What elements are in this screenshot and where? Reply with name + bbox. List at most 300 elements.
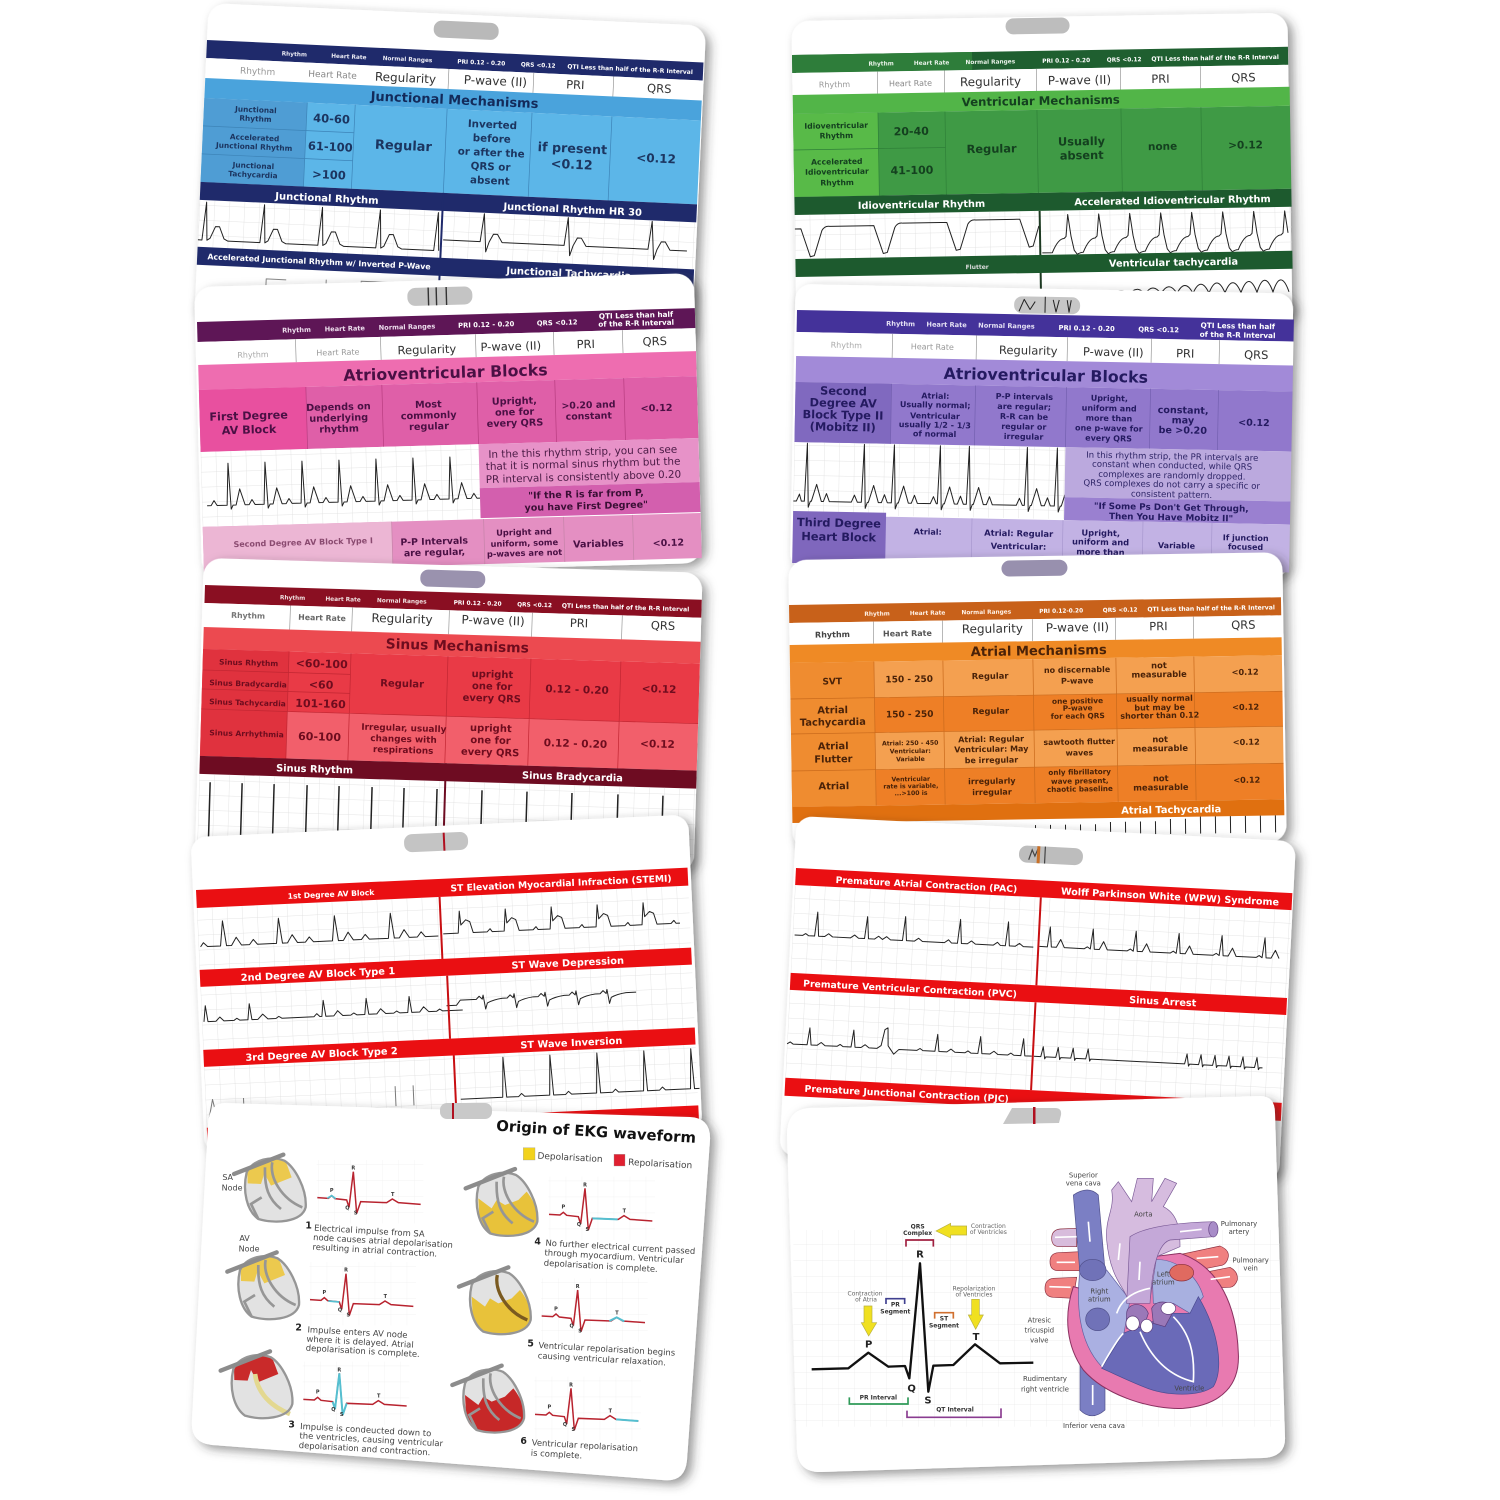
heading: Atrioventricular Blocks bbox=[198, 351, 697, 390]
chart: step 5: S bbox=[578, 1329, 582, 1335]
ecg: second row bbox=[200, 965, 695, 1050]
table: atrial: no discernable bbox=[1044, 665, 1111, 675]
strip titles row 2 bbox=[790, 973, 1287, 1015]
table: next row faded: <0.12 bbox=[653, 537, 684, 549]
chart: step 1: T bbox=[391, 1192, 395, 1198]
badge slot bbox=[1019, 845, 1083, 865]
column heads: Regularity bbox=[962, 621, 1023, 636]
header bar: QTI Less than half of the R-R Interval bbox=[1151, 54, 1279, 63]
table: atrial: 150 - 250 bbox=[885, 675, 933, 685]
table: sinus: Sinus Arrhythmia bbox=[209, 728, 284, 739]
legend bbox=[523, 1148, 692, 1171]
table: first degree: <0.12 bbox=[640, 403, 673, 415]
table: mobitz: Upright, bbox=[1091, 394, 1128, 403]
table: first degree: Most bbox=[415, 399, 442, 411]
strip titles: Idioventricular Rhythm bbox=[858, 199, 985, 212]
strip titles row 1: Wolff Parkinson White (WPW) Syndrome bbox=[1061, 886, 1280, 908]
table: first degree bbox=[199, 376, 698, 452]
column heads: Heart Rate bbox=[911, 342, 954, 352]
labels: heart anatomy: Rudimentary bbox=[1023, 1375, 1067, 1383]
ecg: first row bbox=[197, 886, 691, 970]
text: step 6: is complete. bbox=[531, 1448, 582, 1461]
strip titles: Junctional Rhythm HR 30 bbox=[502, 202, 642, 219]
callout: first degree: "If the R is far from P, bbox=[528, 488, 644, 502]
strip titles row 3: Premature Junctional Contraction (PJC) bbox=[804, 1084, 1009, 1105]
column heads: Regularity bbox=[999, 343, 1058, 358]
red strip peek bbox=[207, 1105, 699, 1146]
header bar: PRI 0.12 - 0.20 bbox=[458, 320, 515, 330]
table: sinus: every QRS bbox=[461, 747, 520, 759]
table: ventricular: >0.12 bbox=[1228, 139, 1263, 152]
table: sinus: <0.12 bbox=[640, 738, 675, 751]
chart: step 2 bbox=[309, 1262, 416, 1325]
label: PR segment: Segment bbox=[880, 1308, 911, 1315]
table: atrial: 150 - 250 bbox=[886, 710, 934, 720]
table: first degree: >0.20 and bbox=[561, 399, 616, 412]
strip titles: Atrial Tachycardia bbox=[1121, 804, 1221, 817]
text: step 5: causing ventricular relaxation. bbox=[538, 1350, 666, 1367]
table: first degree: every QRS bbox=[487, 417, 543, 430]
strip titles bbox=[200, 182, 697, 222]
table: junctional: Regular bbox=[375, 138, 433, 155]
table: next row faded: p-waves are not bbox=[487, 547, 562, 559]
column heads: P-wave (II) bbox=[480, 338, 541, 354]
heading: Atrial Mechanisms bbox=[790, 637, 1282, 663]
table: atrial: Atrial: Regular bbox=[958, 734, 1024, 744]
chart: step 5: R bbox=[576, 1284, 580, 1290]
card: atrial mechanisms bbox=[788, 552, 1287, 850]
label: PR interval bbox=[849, 1395, 908, 1404]
table: ventricular: none bbox=[1148, 141, 1177, 153]
ecg: atrial tachycardia bbox=[1035, 815, 1276, 836]
table: mobitz: be >0.20 bbox=[1158, 425, 1207, 437]
header bar: Rhythm Heart Rate Normal Ranges bbox=[282, 322, 435, 335]
chart: step 2: P bbox=[323, 1290, 327, 1296]
strip titles bbox=[792, 799, 1284, 823]
chart: step 6: S bbox=[572, 1427, 576, 1433]
heading: Junctional Mechanisms: Junctional Mechanisms bbox=[369, 89, 539, 112]
ecg: second row bbox=[785, 990, 1286, 1103]
icon: heart 4 ventricular depolarisation bbox=[466, 1169, 537, 1236]
table: first degree: Depends on bbox=[306, 401, 371, 414]
table: ventricular: 20-40 bbox=[894, 125, 929, 138]
badge slot bbox=[404, 832, 468, 853]
badge slot bbox=[420, 569, 486, 588]
labels: nodes: SA bbox=[222, 1173, 234, 1182]
text: step 6 bbox=[520, 1436, 638, 1461]
header bar bbox=[792, 47, 1288, 73]
table: junctional: Rhythm bbox=[239, 114, 272, 124]
table: atrial: but may be bbox=[1134, 703, 1186, 713]
header bar bbox=[206, 40, 703, 81]
header bar: Rhythm Heart Rate Normal Ranges bbox=[864, 610, 1012, 618]
table: atrial: Atrial bbox=[818, 741, 849, 753]
table: junctional: if present bbox=[537, 139, 608, 157]
heading: Origin of EKG waveform: Origin of EKG waveform bbox=[496, 1118, 696, 1147]
table: atrial: ...>100 is bbox=[894, 790, 928, 797]
table: sinus: Irregular, usually bbox=[361, 723, 447, 735]
heading: Sinus Mechanisms bbox=[203, 627, 701, 664]
table: first degree: Upright, bbox=[492, 396, 537, 408]
label: PR interval: PR Interval bbox=[860, 1395, 897, 1402]
table: sinus: 0.12 - 0.20 bbox=[544, 737, 607, 751]
table: sinus: Sinus Tachycardia bbox=[209, 697, 286, 708]
icon: heart anatomy bbox=[1045, 1178, 1238, 1416]
table: sinus: <60-100 bbox=[295, 657, 348, 671]
heading: Atrioventricular Blocks: Atrioventricular Blocks bbox=[943, 364, 1148, 387]
table: first degree: regular bbox=[409, 421, 449, 433]
table: mobitz: are regular; bbox=[997, 402, 1051, 412]
chart: step 1: Q bbox=[345, 1205, 349, 1211]
column heads: Heart Rate bbox=[308, 70, 357, 82]
column heads: Heart Rate bbox=[316, 347, 360, 358]
table: ventricular: 41-100 bbox=[890, 164, 934, 177]
chart: step 6: P bbox=[548, 1405, 552, 1411]
text: step 1: resulting in atrial contraction. bbox=[312, 1242, 437, 1259]
card: ventricular mechanisms bbox=[791, 13, 1294, 331]
chart: step 5: Q bbox=[570, 1324, 574, 1330]
chart: step 4: Q bbox=[577, 1222, 581, 1228]
card: atrioventricular blocks purple bbox=[790, 284, 1294, 578]
labels: heart anatomy: Ventricle bbox=[1174, 1385, 1204, 1393]
table: first degree: commonly bbox=[401, 410, 457, 422]
header bar: QTI Less than half of the R-R Interval bbox=[1147, 604, 1275, 613]
strip titles row 3: 3rd Degree AV Block Type 2 bbox=[245, 1046, 398, 1064]
table: mobitz: uniform and bbox=[1082, 403, 1137, 414]
table: atrial: P-wave bbox=[1061, 676, 1094, 686]
table: atrial: irregular bbox=[972, 788, 1012, 797]
table: atrial: rate is variable, bbox=[883, 783, 938, 791]
text: step 3: Impulse is condeucted down to bbox=[300, 1421, 432, 1438]
table: atrial: only fibrillatory bbox=[1048, 767, 1111, 777]
header bar: QTI Less than half of the R-R Interval bbox=[567, 63, 693, 76]
label: PR segment: PR bbox=[891, 1302, 900, 1309]
table: mobitz: every QRS bbox=[1085, 434, 1132, 443]
text: step 2: Impulse enters AV node bbox=[307, 1324, 408, 1340]
heading: Sinus Mechanisms: Sinus Mechanisms bbox=[386, 636, 529, 657]
chart: ecg waveform: P bbox=[865, 1339, 872, 1350]
header bar: QTI Less than half bbox=[599, 310, 674, 321]
table: atrial: Ventricular: May bbox=[954, 744, 1029, 754]
table: sinus: upright bbox=[471, 669, 514, 681]
label: QT interval: QT Interval bbox=[936, 1407, 974, 1414]
strip titles row 2: Premature Ventricular Contraction (PVC) bbox=[803, 979, 1017, 1000]
table: sinus bbox=[200, 649, 700, 771]
header bar bbox=[789, 597, 1281, 623]
table: atrial: measurable bbox=[1133, 782, 1189, 793]
table: junctional: Junctional Rhythm bbox=[215, 140, 293, 153]
badge slot bbox=[433, 20, 499, 40]
column heads: P-wave (II) bbox=[1046, 620, 1109, 635]
arrow: QRS complex: of Ventricles bbox=[970, 1229, 1007, 1236]
table: atrial: measurable bbox=[1133, 743, 1188, 754]
table: third degree faded: Atrial: bbox=[914, 527, 942, 537]
table: junctional: Tachycardia bbox=[228, 169, 278, 180]
table: next row faded: Variables bbox=[573, 538, 624, 551]
table: ventricular: Rhythm bbox=[820, 178, 854, 188]
header bar: PRI 0.12 - 0.20 bbox=[454, 600, 502, 608]
header bar: Rhythm Heart Rate Normal Ranges bbox=[868, 59, 1016, 68]
chart: step 4 bbox=[548, 1177, 655, 1240]
text: step 2 bbox=[295, 1323, 420, 1359]
table: first degree: one for bbox=[495, 407, 535, 419]
ecg: first degree bbox=[201, 444, 481, 527]
table: atrial: Tachycardia bbox=[800, 717, 866, 729]
chart: step 4: P bbox=[562, 1205, 566, 1211]
table: sinus: 60-100 bbox=[298, 730, 341, 744]
table: ventricular: absent bbox=[1060, 148, 1104, 163]
table: junctional: Junctional bbox=[234, 104, 277, 115]
column heads: QRS bbox=[1231, 618, 1256, 632]
callout: mobitz: Then You Have Mobitz II" bbox=[1109, 512, 1233, 524]
explanation text: complexes are randomly dropped. bbox=[1098, 470, 1246, 483]
card: ecg and heart anatomy bbox=[787, 1096, 1285, 1472]
header bar: PRI 0.12 - 0.20 bbox=[457, 59, 505, 68]
chart: step 5: P bbox=[554, 1306, 558, 1312]
table: atrial: Flutter bbox=[814, 754, 853, 766]
table: junctional: 61-100 bbox=[308, 139, 353, 155]
text: step 6: 6 bbox=[520, 1436, 527, 1447]
table: mobitz: Atrial: bbox=[921, 391, 949, 401]
vessels: pulmonary veins left bbox=[1045, 1228, 1080, 1298]
labels: nodes: AV bbox=[239, 1234, 250, 1243]
column heads: Regularity bbox=[375, 70, 436, 86]
chart: step 3 bbox=[303, 1362, 409, 1425]
table: ventricular: Rhythm bbox=[819, 131, 853, 141]
dividers bbox=[1031, 897, 1041, 1090]
icon: heart 6 repolarisation complete bbox=[452, 1366, 524, 1433]
labels: heart anatomy: Superior bbox=[1069, 1172, 1098, 1180]
table: first degree: constant bbox=[566, 410, 613, 423]
table: junctional bbox=[201, 98, 701, 204]
table: junctional: <0.12 bbox=[636, 151, 676, 166]
strip titles: Sinus Rhythm bbox=[276, 763, 353, 776]
column heads: QRS bbox=[1244, 348, 1269, 362]
table: mobitz: irregular bbox=[1004, 432, 1044, 442]
table: next row faded: uniform, some bbox=[490, 537, 559, 549]
table: mobitz: Block Type II bbox=[802, 407, 884, 423]
chart: ecg waveform bbox=[812, 1249, 1033, 1406]
card: rhythm strips red left bbox=[191, 815, 702, 1154]
chart: step 3: Q bbox=[331, 1407, 335, 1413]
labels: heart anatomy: Aorta bbox=[1134, 1211, 1153, 1219]
chart: ecg waveform: T bbox=[973, 1332, 980, 1343]
labels: heart anatomy bbox=[1021, 1172, 1269, 1430]
table: sinus: every QRS bbox=[462, 693, 521, 705]
strip titles row 2 bbox=[200, 948, 692, 987]
header bar: QRS <0.12 bbox=[1138, 326, 1179, 334]
table: ventricular: Idioventricular bbox=[805, 167, 869, 177]
chart: step 2: T bbox=[384, 1294, 388, 1300]
column heads bbox=[198, 328, 696, 365]
header bar: PRI 0.12-0.20 bbox=[1039, 608, 1083, 615]
table: atrial: SVT bbox=[822, 677, 843, 687]
table: junctional: Inverted bbox=[468, 118, 517, 132]
text: step 1 bbox=[305, 1220, 453, 1259]
chart: step 1: R bbox=[351, 1166, 355, 1172]
chart: step 2: Q bbox=[338, 1307, 342, 1313]
dividers bbox=[440, 897, 457, 1119]
table: atrial: Variable bbox=[896, 756, 925, 763]
table: sinus: changes with bbox=[370, 734, 437, 746]
explanation text: QRS complexes do not carry a specific or bbox=[1083, 479, 1261, 492]
table: third degree faded: more than bbox=[1076, 546, 1125, 557]
heading: Ventricular Mechanisms bbox=[793, 87, 1290, 114]
ecg fragments bbox=[265, 274, 556, 310]
table: mobitz: Ventricular bbox=[910, 411, 960, 421]
badge slot bbox=[1005, 17, 1070, 34]
badge slot bbox=[440, 1103, 492, 1119]
column heads bbox=[205, 58, 703, 101]
text: step 3: depolarisation and contraction. bbox=[299, 1440, 431, 1457]
labels: heart anatomy: Pulmonary bbox=[1232, 1256, 1269, 1264]
table: junctional: absent bbox=[470, 174, 510, 188]
table: first degree: AV Block bbox=[222, 423, 277, 437]
column heads: P-wave (II) bbox=[1083, 344, 1144, 360]
table: mobitz: P-P intervals bbox=[996, 392, 1053, 402]
table: mobitz: Usually normal; bbox=[900, 400, 971, 410]
table: junctional: or after the bbox=[457, 145, 525, 161]
table: next row faded bbox=[203, 513, 702, 572]
text: step 1: 1 bbox=[305, 1220, 312, 1231]
card: sinus mechanisms bbox=[195, 558, 703, 873]
chart: step 4: S bbox=[586, 1227, 590, 1233]
table: third degree faded: Variable bbox=[1158, 541, 1196, 551]
column heads: Heart Rate bbox=[298, 613, 346, 623]
labels: heart anatomy: Right bbox=[1090, 1287, 1109, 1295]
column heads: PRI bbox=[566, 77, 585, 92]
header bar: QRS <0.12 bbox=[1103, 608, 1138, 614]
column heads: Rhythm bbox=[815, 630, 850, 640]
card: origin of EKG waveform bbox=[192, 1103, 710, 1480]
label: ST segment: Segment bbox=[929, 1322, 959, 1329]
header bar bbox=[204, 585, 702, 618]
ecg: mobitz II bbox=[793, 442, 1067, 519]
chart: ecg waveform: R bbox=[916, 1249, 924, 1260]
text: step 4: through myocardium. Ventricular bbox=[544, 1247, 685, 1265]
table: atrial: Atrial: 250 - 450 bbox=[882, 740, 939, 748]
explanation text: consistent pattern. bbox=[1131, 489, 1212, 501]
table: mobitz: may bbox=[1172, 415, 1195, 427]
labels: heart anatomy: artery bbox=[1229, 1228, 1249, 1236]
column heads: Rhythm bbox=[831, 341, 862, 350]
chart: step 3: S bbox=[340, 1412, 344, 1418]
table: sinus: Sinus Rhythm bbox=[219, 657, 279, 668]
strip titles: Junctional Rhythm bbox=[274, 191, 379, 207]
table: sinus: respirations bbox=[373, 745, 434, 757]
column heads: PRI bbox=[576, 337, 595, 351]
heart wall bbox=[1068, 1253, 1238, 1408]
labels: heart anatomy: Inferior vena cava bbox=[1063, 1422, 1125, 1430]
header bar: Rhythm Heart Rate Normal Ranges bbox=[886, 320, 1035, 331]
table: third degree faded: Ventricular: bbox=[991, 541, 1046, 552]
text: step 4: 4 bbox=[534, 1236, 541, 1247]
chart: step 3: P bbox=[316, 1390, 320, 1396]
strip titles row 2: 2nd Degree AV Block Type 1 bbox=[241, 966, 396, 984]
explanation text: In the this rhythm strip, you can see bbox=[488, 444, 677, 461]
table: next row faded: are regular, bbox=[404, 547, 465, 559]
table: junctional: >100 bbox=[312, 167, 346, 182]
chart: step 1: S bbox=[354, 1210, 358, 1216]
superior vena cava bbox=[1073, 1190, 1105, 1273]
strip titles bbox=[794, 189, 1292, 215]
content bbox=[221, 1118, 696, 1461]
column heads: PRI bbox=[1176, 346, 1195, 361]
arrow: QRS complex: Contraction bbox=[971, 1223, 1006, 1230]
chart: step 4: R bbox=[583, 1182, 587, 1188]
arrow: QRS complex: QRS bbox=[911, 1223, 925, 1230]
card: junctional mechanisms bbox=[194, 3, 706, 345]
table: sinus: <60 bbox=[309, 678, 334, 692]
ecg: third row bbox=[204, 1044, 700, 1132]
labels: heart anatomy: atrium bbox=[1088, 1295, 1111, 1303]
header bar: QRS <0.12 bbox=[517, 602, 552, 609]
label: ST segment: ST bbox=[940, 1316, 949, 1323]
chart: step 3: R bbox=[337, 1367, 341, 1373]
column heads: QRS bbox=[651, 618, 675, 633]
text: step 4: No further electrical current passed bbox=[545, 1238, 696, 1256]
table: third degree faded: Heart Block bbox=[801, 529, 877, 545]
header bar: QTI Less than half bbox=[1200, 321, 1276, 331]
table: sinus: Sinus Bradycardia bbox=[209, 678, 287, 689]
text: step 3: 3 bbox=[288, 1420, 295, 1431]
strip titles lower: Accelerated Junctional Rhythm w/ Inverted P-Wave bbox=[207, 252, 431, 271]
column heads: QRS bbox=[642, 334, 667, 349]
column heads: PRI bbox=[1151, 72, 1170, 86]
table: junctional: before bbox=[473, 132, 511, 146]
table: mobitz: one p-wave for bbox=[1075, 423, 1143, 434]
table: atrial: not bbox=[1151, 660, 1167, 670]
ecg: ventricular tachycardia bbox=[1081, 280, 1289, 295]
header bar: QRS <0.12 bbox=[1107, 57, 1142, 64]
table: atrial: Regular bbox=[972, 706, 1010, 716]
table: atrial: <0.12 bbox=[1233, 737, 1260, 747]
column heads: Heart Rate bbox=[889, 79, 932, 88]
table: atrial: chaotic baseline bbox=[1047, 784, 1113, 794]
text: step 6: Ventricular repolarisation bbox=[532, 1437, 638, 1453]
grid bbox=[793, 1230, 1280, 1427]
column heads: Rhythm bbox=[231, 611, 265, 621]
callout: mobitz: "If Some Ps Don't Get Through, bbox=[1094, 502, 1249, 515]
table: sinus: one for bbox=[472, 681, 513, 693]
table: atrial: measurable bbox=[1131, 669, 1187, 680]
column heads: P-wave (II) bbox=[461, 613, 525, 628]
ecg: junctional rhythm bbox=[195, 182, 697, 322]
header bar: Rhythm Heart Rate Normal Ranges bbox=[280, 595, 427, 606]
icon: heart 2 AV node bbox=[227, 1252, 299, 1319]
column heads: P-wave (II) bbox=[1048, 73, 1111, 88]
chart: step 3: T bbox=[377, 1394, 381, 1400]
explanation text bbox=[479, 438, 700, 488]
strip titles row 2: Sinus Arrest bbox=[1129, 995, 1197, 1009]
table: mobitz bbox=[794, 382, 1293, 452]
text: step 4: depolarisation is complete. bbox=[544, 1258, 658, 1274]
content bbox=[793, 1172, 1280, 1430]
table: atrial: one positive bbox=[1052, 696, 1103, 706]
arrow: P wave: of Atria bbox=[855, 1296, 877, 1303]
strip titles row 1: ST Elevation Myocardial Infraction (STEMI) bbox=[450, 873, 672, 894]
explanation text: In this rhythm strip, the PR intervals are bbox=[1086, 451, 1258, 464]
column heads: QRS bbox=[647, 81, 672, 96]
table: atrial: be irregular bbox=[965, 755, 1018, 765]
column heads bbox=[796, 332, 1293, 366]
strip titles lower: Flutter bbox=[965, 264, 989, 271]
text: step 1: Electrical impulse from SA bbox=[314, 1223, 425, 1239]
labels: heart anatomy: atrium bbox=[1152, 1279, 1175, 1287]
column heads: PRI bbox=[570, 616, 588, 630]
table: mobitz: Second bbox=[820, 383, 867, 398]
column heads: QRS bbox=[1231, 70, 1256, 85]
